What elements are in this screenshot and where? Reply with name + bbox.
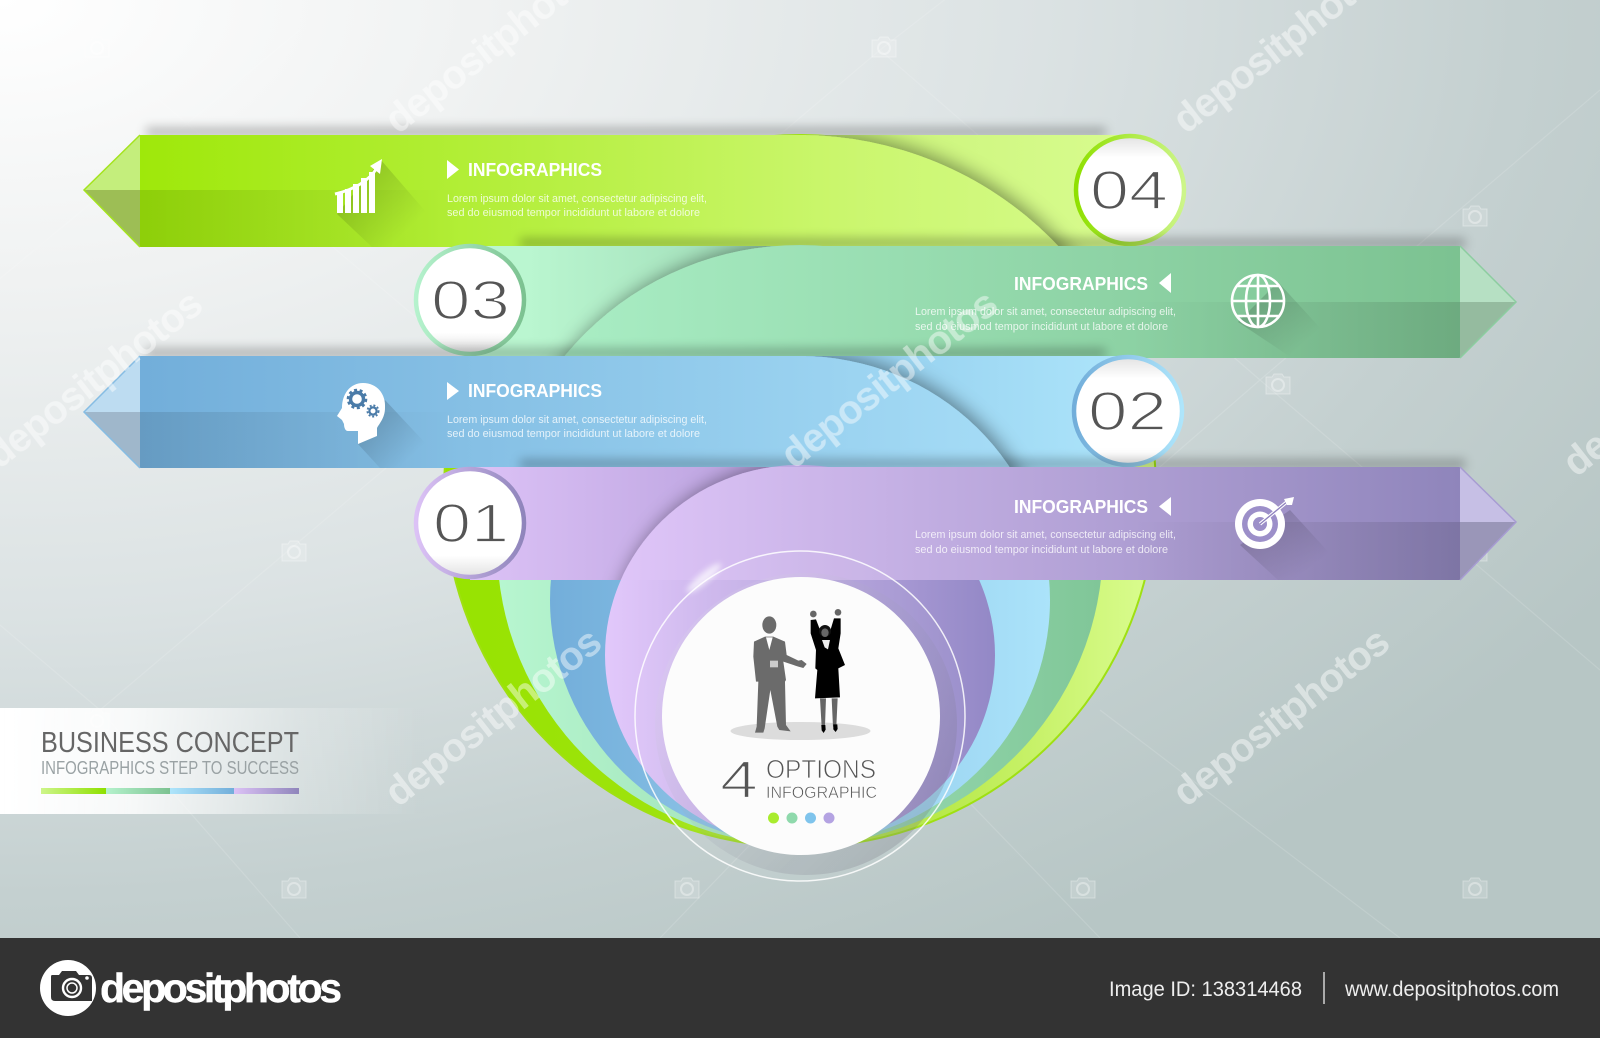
icon: businessman and businesswoman bbox=[753, 609, 845, 733]
number badge 04: 04 bbox=[1090, 159, 1168, 221]
icon: target with arrow bbox=[1235, 497, 1332, 580]
ground shadow bbox=[730, 722, 870, 740]
icon: head with gears bbox=[337, 383, 428, 468]
panel: step 1 purple band bbox=[416, 459, 1516, 845]
watermark text: depositphotos bbox=[1164, 619, 1398, 815]
text: step 2 body: sed do eiusmod tempor incididunt ut labore et dolore bbox=[447, 428, 700, 440]
heading: step 2: INFOGRAPHICS bbox=[468, 381, 602, 401]
colour strip bbox=[41, 788, 299, 794]
panel: step 4 green band bbox=[84, 127, 1184, 847]
text: website: www.depositphotos.com bbox=[1344, 978, 1559, 1001]
heading: step 1: INFOGRAPHICS bbox=[1014, 497, 1148, 517]
text: step 1 body: sed do eiusmod tempor incididunt ut labore et dolore bbox=[915, 544, 1168, 556]
legend dots bbox=[768, 812, 834, 824]
panel: step 2 blue band bbox=[84, 348, 1182, 844]
text: step 3 body: sed do eiusmod tempor incididunt ut labore et dolore bbox=[915, 321, 1168, 333]
text: 4 options infographic bbox=[720, 751, 877, 810]
number badge 03 bbox=[416, 246, 524, 354]
text: step 4 body: Lorem ipsum dolor sit amet, consectetur adipiscing elit, bbox=[447, 193, 707, 205]
heading: step 3: INFOGRAPHICS bbox=[1014, 274, 1148, 294]
number badge 02: 02 bbox=[1088, 380, 1167, 442]
subheading: step to success: INFOGRAPHICS STEP TO SUCCESS bbox=[41, 758, 299, 778]
footer bar bbox=[0, 938, 1600, 1038]
number badge 01 bbox=[416, 469, 524, 577]
heading: business concept: BUSINESS CONCEPT bbox=[41, 727, 299, 759]
text: step 2 body: Lorem ipsum dolor sit amet, consectetur adipiscing elit, bbox=[447, 414, 707, 426]
watermark text: depositphotos bbox=[376, 619, 610, 815]
number badge 02 bbox=[1074, 357, 1182, 465]
watermark cameras bbox=[85, 37, 1487, 898]
text: step 2 body bbox=[447, 414, 707, 440]
text: image id: Image ID: 138314468 bbox=[1109, 978, 1302, 1001]
text: step 4 body bbox=[447, 193, 707, 219]
icon: globe bbox=[1232, 275, 1322, 358]
number badge 04 bbox=[1076, 136, 1184, 244]
text: 4 options infographic: 4 bbox=[720, 751, 758, 810]
panel: business concept title bbox=[0, 708, 425, 814]
text: step 1 body: Lorem ipsum dolor sit amet, consectetur adipiscing elit, bbox=[915, 529, 1176, 541]
text: step 4 body: sed do eiusmod tempor incididunt ut labore et dolore bbox=[447, 207, 700, 219]
text: step 3 body: Lorem ipsum dolor sit amet, consectetur adipiscing elit, bbox=[915, 306, 1176, 318]
number badge 03: 03 bbox=[431, 269, 510, 331]
icon: rising bar chart bbox=[335, 159, 426, 247]
number badge 01: 01 bbox=[433, 492, 509, 554]
heading: step 4: INFOGRAPHICS bbox=[468, 160, 602, 180]
watermark text: depositphotos bbox=[772, 281, 1006, 477]
text: 4 options infographic: INFOGRAPHIC bbox=[766, 783, 877, 802]
watermark text bbox=[0, 0, 1600, 815]
logo: camera badge bbox=[40, 960, 96, 1016]
panel: step 3 teal band bbox=[416, 238, 1516, 845]
text: step 3 body bbox=[915, 306, 1176, 333]
central glass disc bbox=[635, 551, 965, 881]
logo: wordmark: depositphotos bbox=[100, 965, 342, 1011]
text: step 1 body bbox=[915, 529, 1176, 556]
text: 4 options infographic: OPTIONS bbox=[766, 754, 876, 784]
divider bbox=[1323, 972, 1325, 1004]
